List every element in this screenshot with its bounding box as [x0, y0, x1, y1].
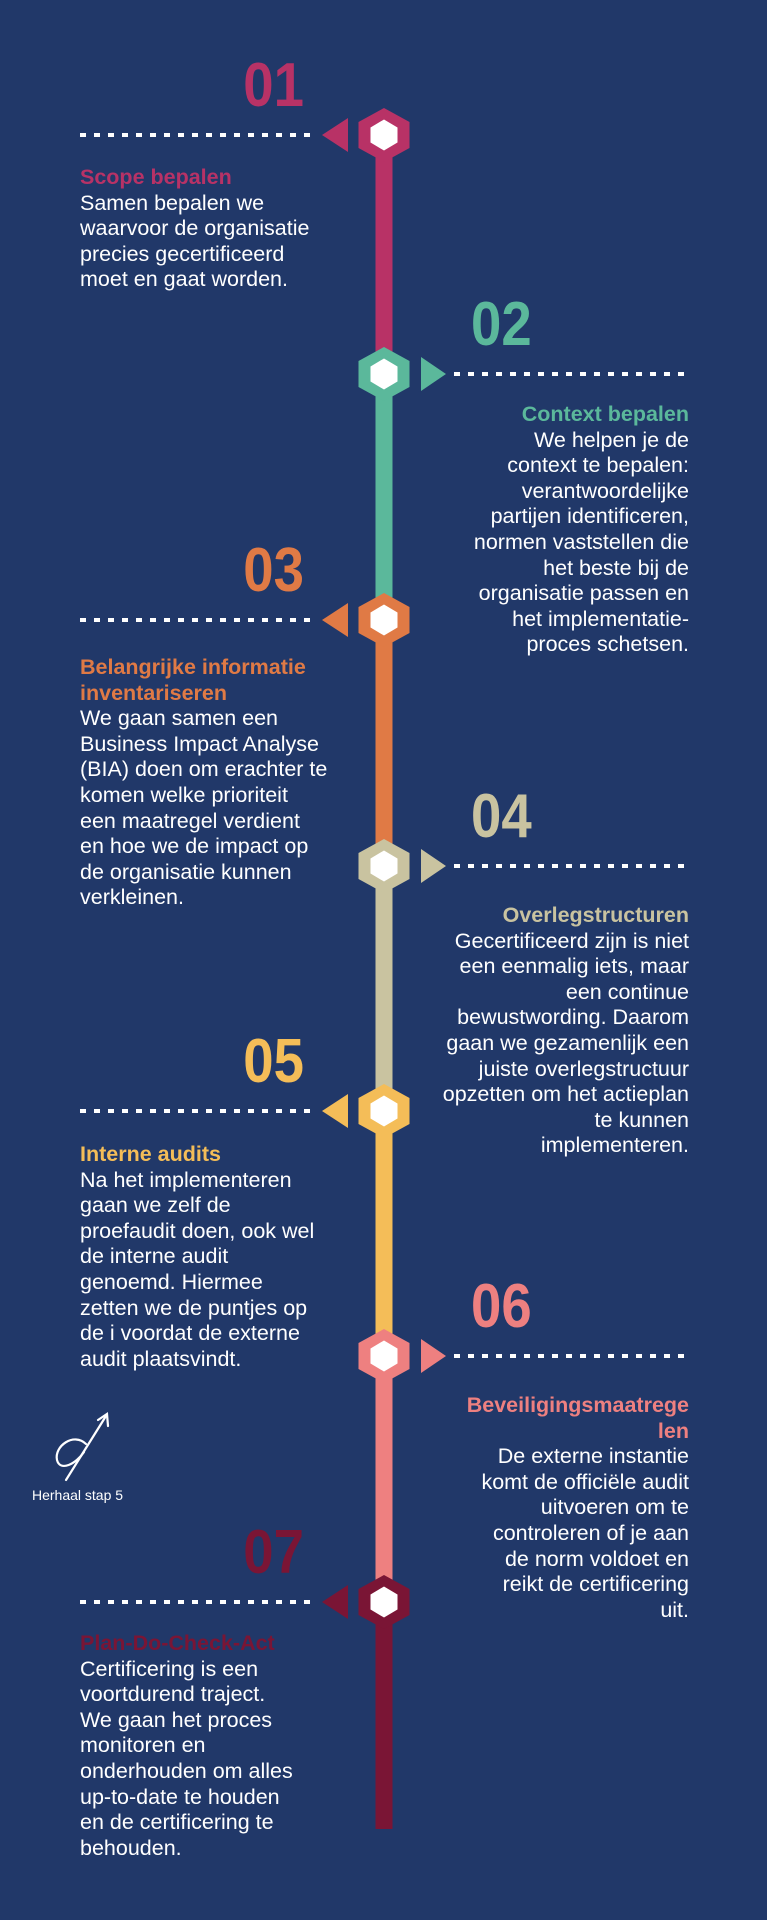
text: Interne audits: de i voordat de externe — [80, 1321, 300, 1345]
text: Interne audits: de interne audit — [80, 1244, 228, 1268]
text: Belangrijke informatie inventariseren: Belangrijke informatie — [80, 655, 306, 679]
node 04 — [358, 839, 690, 893]
text: Plan-Do-Check-Act: up-to-date te houden — [80, 1785, 280, 1809]
number 07: 07 — [243, 1518, 304, 1587]
text: Belangrijke informatie inventariseren: (BIA) doen om erachter te — [80, 757, 327, 781]
text: Overlegstructuren: te kunnen — [595, 1108, 689, 1132]
text: Belangrijke informatie inventariseren: en hoe we de impact op — [80, 834, 308, 858]
text: Belangrijke informatie inventariseren: inventariseren — [80, 681, 227, 705]
text: Scope bepalen: precies gecertificeerd — [80, 242, 284, 266]
text: Overlegstructuren: een eenmalig iets, maar — [460, 954, 689, 978]
text: Overlegstructuren: juiste overlegstructuur — [479, 1057, 689, 1081]
timeline line segments — [376, 135, 392, 1829]
text: Context bepalen: het beste bij de — [543, 556, 689, 580]
text: Beveiligingsmaatregelen: controleren of je aan — [493, 1521, 689, 1545]
text: Interne audits: zetten we de puntjes op — [80, 1296, 307, 1320]
text: Context bepalen: partijen identificeren, — [491, 504, 689, 528]
text: Overlegstructuren: Gecertificeerd zijn is niet — [455, 929, 689, 953]
text: Belangrijke informatie inventariseren: een maatregel verdient — [80, 809, 300, 833]
text: Belangrijke informatie inventariseren: Business Impact Analyse — [80, 732, 319, 756]
node 02 — [358, 347, 690, 401]
text: Overlegstructuren: een continue — [566, 980, 689, 1004]
text: Belangrijke informatie inventariseren — [80, 655, 327, 909]
text: Scope bepalen: Samen bepalen we — [80, 191, 264, 215]
text: Overlegstructuren: bewustwording. Daarom — [457, 1005, 689, 1029]
text: Beveiligingsmaatregelen: reikt de certificering — [503, 1572, 689, 1596]
text: Context bepalen: het implementatie- — [512, 607, 689, 631]
text: Belangrijke informatie inventariseren: We gaan samen een — [80, 706, 278, 730]
text: Context bepalen — [474, 402, 689, 656]
text: Plan-Do-Check-Act: en de certificering te — [80, 1810, 274, 1834]
text: Belangrijke informatie inventariseren: verkleinen. — [80, 885, 184, 909]
text: Scope bepalen: waarvoor de organisatie — [80, 216, 309, 240]
text: Plan-Do-Check-Act: Plan-Do-Check-Act — [80, 1631, 275, 1655]
number 01: 01 — [243, 51, 304, 120]
text: Overlegstructuren — [443, 903, 689, 1157]
text: Overlegstructuren: opzetten om het actieplan — [443, 1082, 689, 1106]
text: Plan-Do-Check-Act: behouden. — [80, 1836, 182, 1860]
text: Plan-Do-Check-Act — [80, 1631, 293, 1860]
text: Context bepalen: organisatie passen en — [479, 581, 689, 605]
text: Belangrijke informatie inventariseren: de organisatie kunnen — [80, 860, 292, 884]
text: Plan-Do-Check-Act: monitoren en — [80, 1733, 206, 1757]
text: Context bepalen: Context bepalen — [522, 402, 689, 426]
text: Context bepalen: proces schetsen. — [526, 632, 689, 656]
text: Beveiligingsmaatregelen: len — [658, 1419, 689, 1443]
number 02: 02 — [471, 290, 532, 359]
text: Interne audits: genoemd. Hiermee — [80, 1270, 263, 1294]
node 07 — [80, 1575, 410, 1629]
text: Beveiligingsmaatregelen: uit. — [660, 1598, 689, 1622]
number 04: 04 — [471, 782, 532, 851]
text: Interne audits: gaan we zelf de — [80, 1193, 231, 1217]
text: Beveiligingsmaatregelen: uitvoeren om te — [541, 1495, 689, 1519]
node 05 — [80, 1084, 410, 1138]
text: Beveiligingsmaatregelen: Beveiligingsmaatrege — [467, 1393, 689, 1417]
text: Scope bepalen — [80, 165, 309, 291]
number 05: 05 — [243, 1027, 304, 1096]
text: Plan-Do-Check-Act: We gaan het proces — [80, 1708, 272, 1732]
text: Scope bepalen: moet en gaat worden. — [80, 267, 288, 291]
text: Beveiligingsmaatregelen: De externe instantie — [498, 1444, 689, 1468]
text: Overlegstructuren: Overlegstructuren — [503, 903, 689, 927]
node 03 — [80, 593, 410, 647]
text: Context bepalen: We helpen je de — [534, 428, 689, 452]
text: Beveiligingsmaatregelen — [467, 1393, 689, 1622]
text: Beveiligingsmaatregelen: komt de officiële audit — [481, 1470, 689, 1494]
number 06: 06 — [471, 1272, 532, 1341]
text: Overlegstructuren: gaan we gezamenlijk een — [446, 1031, 689, 1055]
text: Overlegstructuren: implementeren. — [541, 1133, 689, 1157]
text: Belangrijke informatie inventariseren: komen welke prioriteit — [80, 783, 288, 807]
text: Interne audits: audit plaatsvindt. — [80, 1347, 241, 1371]
text: Interne audits: Na het implementeren — [80, 1168, 292, 1192]
text: Interne audits — [80, 1142, 314, 1371]
text: Context bepalen: normen vaststellen die — [474, 530, 689, 554]
text: Plan-Do-Check-Act: Certificering is een — [80, 1657, 258, 1681]
text: Interne audits: Interne audits — [80, 1142, 221, 1166]
number 03: 03 — [243, 536, 304, 605]
text: Plan-Do-Check-Act: voortdurend traject. — [80, 1682, 265, 1706]
node 06 — [358, 1329, 690, 1383]
text: Interne audits: proefaudit doen, ook wel — [80, 1219, 314, 1243]
text: Beveiligingsmaatregelen: de norm voldoet en — [505, 1547, 689, 1571]
caption: Herhaal stap 5: Herhaal stap 5 — [32, 1487, 123, 1503]
text: Scope bepalen: Scope bepalen — [80, 165, 232, 189]
text: Context bepalen: verantwoordelijke — [522, 479, 689, 503]
text: Plan-Do-Check-Act: onderhouden om alles — [80, 1759, 293, 1783]
node 01 — [80, 108, 410, 162]
icon: repeat loop arrow — [57, 1414, 108, 1480]
text: Context bepalen: context te bepalen: — [507, 453, 689, 477]
